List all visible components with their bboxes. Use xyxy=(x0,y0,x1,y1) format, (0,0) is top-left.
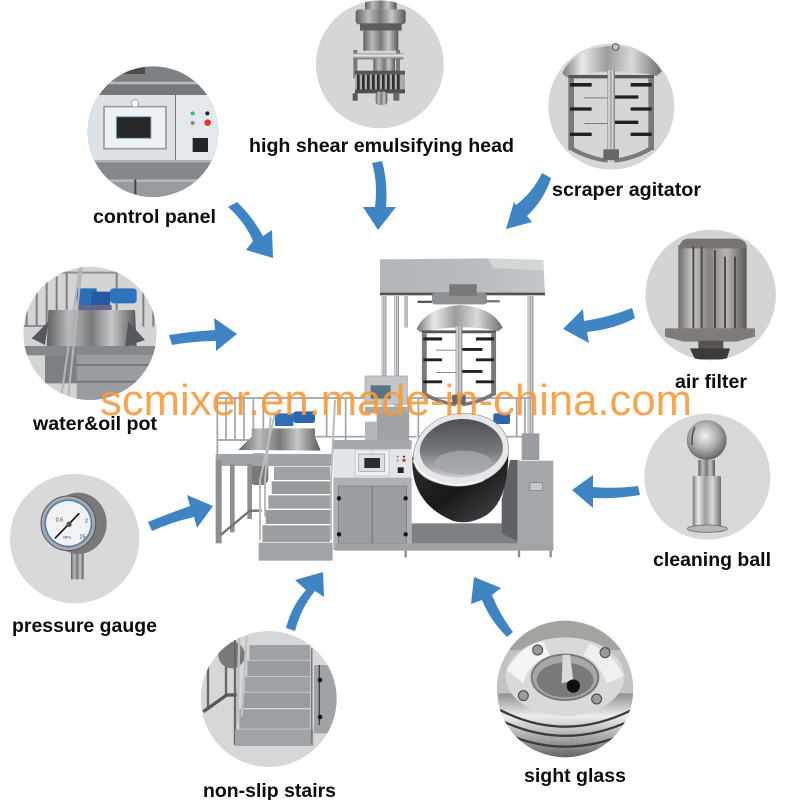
panel: scraper agitator xyxy=(548,44,701,201)
arrow: air filter xyxy=(563,308,635,343)
panel: sight glass xyxy=(495,620,635,787)
control box on column xyxy=(365,376,408,441)
photo: pressure gauge: 0.5 xyxy=(56,518,63,524)
arrow: cleaning ball xyxy=(572,475,640,508)
label: high shear emulsifying head: high shear emulsifying head xyxy=(249,135,514,157)
label: sight glass: sight glass xyxy=(524,765,626,787)
photo: water and oil pot xyxy=(23,267,163,403)
panel: air filter xyxy=(645,230,776,393)
arrow: sight glass xyxy=(471,577,513,637)
guard railing xyxy=(217,398,535,460)
platform and frame xyxy=(216,454,332,543)
photo: emulsifying head xyxy=(316,0,444,128)
photo: sight glass xyxy=(495,620,635,758)
photo: air filter xyxy=(645,230,776,360)
label: cleaning ball: cleaning ball xyxy=(653,549,771,571)
arrow: water and oil pot xyxy=(169,318,237,351)
arrow: non-slip stairs xyxy=(286,572,324,631)
water and oil pot on platform xyxy=(238,411,510,485)
photo: scraper agitator xyxy=(548,44,674,170)
staircase xyxy=(259,400,335,561)
panel: high shear emulsifying head xyxy=(249,0,514,157)
label: scraper agitator: scraper agitator xyxy=(552,179,701,201)
label: control panel: control panel xyxy=(93,206,216,228)
right housing and floor xyxy=(335,433,553,557)
label: air filter: air filter xyxy=(675,371,747,393)
panel: control panel xyxy=(87,65,220,228)
arrow: control panel xyxy=(228,202,273,258)
panel: pressure gauge xyxy=(10,474,157,637)
photo: pressure gauge: MPa xyxy=(63,535,72,539)
label: water and oil pot: water&oil pot xyxy=(32,413,157,435)
arrow: pressure gauge xyxy=(148,495,213,531)
upper vessel with scraper agitator xyxy=(417,284,503,406)
tilting main mixing bowl xyxy=(412,413,509,522)
photo: non-slip stairs xyxy=(201,631,337,767)
photo: pressure gauge xyxy=(10,474,139,603)
arrow: scraper agitator xyxy=(506,173,551,229)
photo: pressure gauge: 25 xyxy=(80,535,86,541)
photo: cleaning ball xyxy=(644,414,770,540)
photo: control panel xyxy=(87,65,220,199)
arrow: emulsifying head xyxy=(363,161,396,230)
lifting head housing xyxy=(380,258,545,295)
panel: cleaning ball xyxy=(644,414,771,571)
machine: vacuum emulsifying mixer xyxy=(216,258,553,561)
watermark: scmixer.en.made-in-china.com xyxy=(100,377,692,425)
panel: non-slip stairs xyxy=(201,631,337,800)
panel: water and oil pot xyxy=(23,267,163,435)
support columns xyxy=(382,296,533,434)
label: pressure gauge: pressure gauge xyxy=(12,615,157,637)
photo: pressure gauge: 2 xyxy=(85,519,88,525)
central cabinet xyxy=(333,440,412,550)
